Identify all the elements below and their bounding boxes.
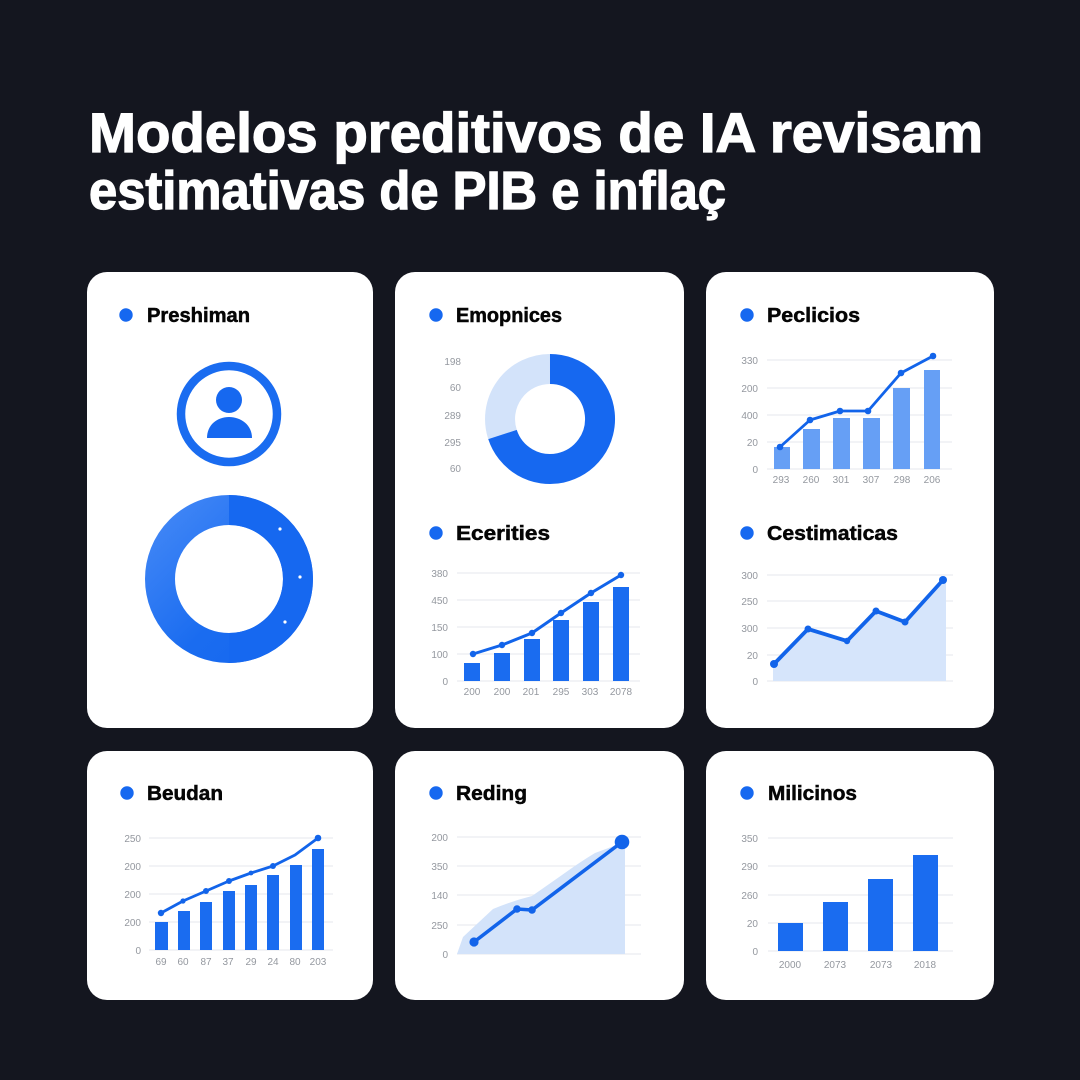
bar and line chart: Ecerities: 2078 — [610, 687, 633, 698]
bar chart: Milicinos: 0 — [752, 947, 758, 958]
bar and line chart: Peclicios — [741, 353, 952, 486]
bar and line chart: Beudan: 80 — [289, 957, 301, 968]
bar and line chart: Peclicios: 301 — [833, 475, 850, 486]
bar chart: Milicinos: 2018 — [914, 960, 937, 971]
title: estimativas de PIB e inflaç — [89, 161, 726, 221]
bar and line chart: Ecerities: 200 — [464, 687, 481, 698]
panel: Peclicios — [706, 272, 994, 728]
area chart: Cestimaticas — [741, 571, 953, 688]
bar and line chart: Beudan: 200 — [124, 862, 141, 873]
bar and line chart: Beudan: 24 — [267, 957, 279, 968]
bar and line chart: Peclicios: 307 — [863, 475, 880, 486]
bar and line chart: Peclicios: 20 — [747, 438, 758, 449]
bar and line chart: Peclicios: 0 — [752, 465, 758, 476]
bar chart: Milicinos: 350 — [741, 834, 758, 845]
bar and line chart: Beudan: 203 — [310, 957, 327, 968]
panel: Preshiman: Preshiman — [147, 305, 250, 327]
bar and line chart: Beudan: 0 — [135, 946, 141, 957]
bar chart: Milicinos: 2073 — [824, 960, 847, 971]
area and line chart: Reding — [431, 833, 641, 961]
panel: Reding: Reding — [456, 783, 527, 805]
bar and line chart: Beudan: 200 — [124, 890, 141, 901]
bar and line chart: Ecerities — [431, 569, 640, 698]
area and line chart: Reding: 350 — [431, 862, 448, 873]
bar chart: Milicinos: 260 — [741, 891, 758, 902]
bar and line chart: Ecerities: 150 — [431, 623, 448, 634]
donut chart: small: 60 — [450, 383, 461, 394]
bar chart: Milicinos: 2000 — [779, 960, 802, 971]
bar and line chart: Peclicios: 200 — [741, 384, 758, 395]
bar and line chart: Beudan: 200 — [124, 918, 141, 929]
panel: Reding — [395, 751, 684, 1000]
bar and line chart: Peclicios: 293 — [773, 475, 790, 486]
area and line chart: Reding: 250 — [431, 921, 448, 932]
icon: person in ring — [181, 366, 277, 462]
donut chart: small: 295 — [444, 438, 461, 449]
bar and line chart: Ecerities: 303 — [582, 687, 599, 698]
bar and line chart: Peclicios: 206 — [924, 475, 941, 486]
donut chart: small: 60 — [450, 464, 461, 475]
donut chart: small: 289 — [444, 411, 461, 422]
bar and line chart: Ecerities: 100 — [431, 650, 448, 661]
bar and line chart: Peclicios: 260 — [803, 475, 820, 486]
bar chart: Milicinos: 290 — [741, 862, 758, 873]
bar chart: Milicinos: 2073 — [870, 960, 893, 971]
bar and line chart: Peclicios: 330 — [741, 356, 758, 367]
panel: Emopnices — [395, 272, 684, 728]
subheading dot and label: Ecerities: Ecerities — [456, 523, 550, 545]
bar and line chart: Beudan: 250 — [124, 834, 141, 845]
bar and line chart: Ecerities: 380 — [431, 569, 448, 580]
area chart: Cestimaticas: 300 — [741, 624, 758, 635]
bar and line chart: Beudan: 29 — [245, 957, 257, 968]
area chart: Cestimaticas: 0 — [752, 677, 758, 688]
bar and line chart: Peclicios: 400 — [741, 411, 758, 422]
bar and line chart: Beudan: 37 — [222, 957, 234, 968]
bar and line chart: Beudan: 69 — [155, 957, 167, 968]
title — [89, 101, 983, 221]
area chart: Cestimaticas: 250 — [741, 597, 758, 608]
panel: Beudan: Beudan — [147, 783, 223, 805]
bar and line chart: Beudan — [124, 834, 333, 968]
bar chart: Milicinos: 20 — [747, 919, 758, 930]
area and line chart: Reding: 0 — [442, 950, 448, 961]
area chart: Cestimaticas: 300 — [741, 571, 758, 582]
subheading dot and label: Ecerities — [429, 523, 550, 545]
panel: Beudan — [87, 751, 373, 1000]
area and line chart: Reding: 140 — [431, 891, 448, 902]
bar and line chart: Ecerities: 295 — [553, 687, 570, 698]
panel: Preshiman — [87, 272, 373, 728]
bar and line chart: Ecerities: 0 — [442, 677, 448, 688]
bar and line chart: Ecerities: 450 — [431, 596, 448, 607]
bar chart: Milicinos — [741, 834, 953, 971]
area chart: Cestimaticas: 20 — [747, 651, 758, 662]
panel: Milicinos — [706, 751, 994, 1000]
panel: Milicinos: Milicinos — [768, 783, 857, 805]
title: Modelos preditivos de IA revisam — [89, 101, 983, 164]
bar and line chart: Ecerities: 201 — [523, 687, 540, 698]
bar and line chart: Peclicios: 298 — [894, 475, 911, 486]
donut chart: small: 198 — [444, 357, 461, 368]
bar and line chart: Beudan: 60 — [177, 957, 189, 968]
donut chart: small — [444, 357, 600, 475]
donut chart: large — [160, 495, 313, 663]
panel: Peclicios: Peclicios — [767, 305, 860, 327]
panel: Emopnices: Emopnices — [456, 305, 562, 327]
bar and line chart: Beudan: 87 — [200, 957, 212, 968]
area and line chart: Reding: 200 — [431, 833, 448, 844]
subheading dot and label: Cestimaticas: Cestimaticas — [767, 523, 898, 545]
bar and line chart: Ecerities: 200 — [494, 687, 511, 698]
